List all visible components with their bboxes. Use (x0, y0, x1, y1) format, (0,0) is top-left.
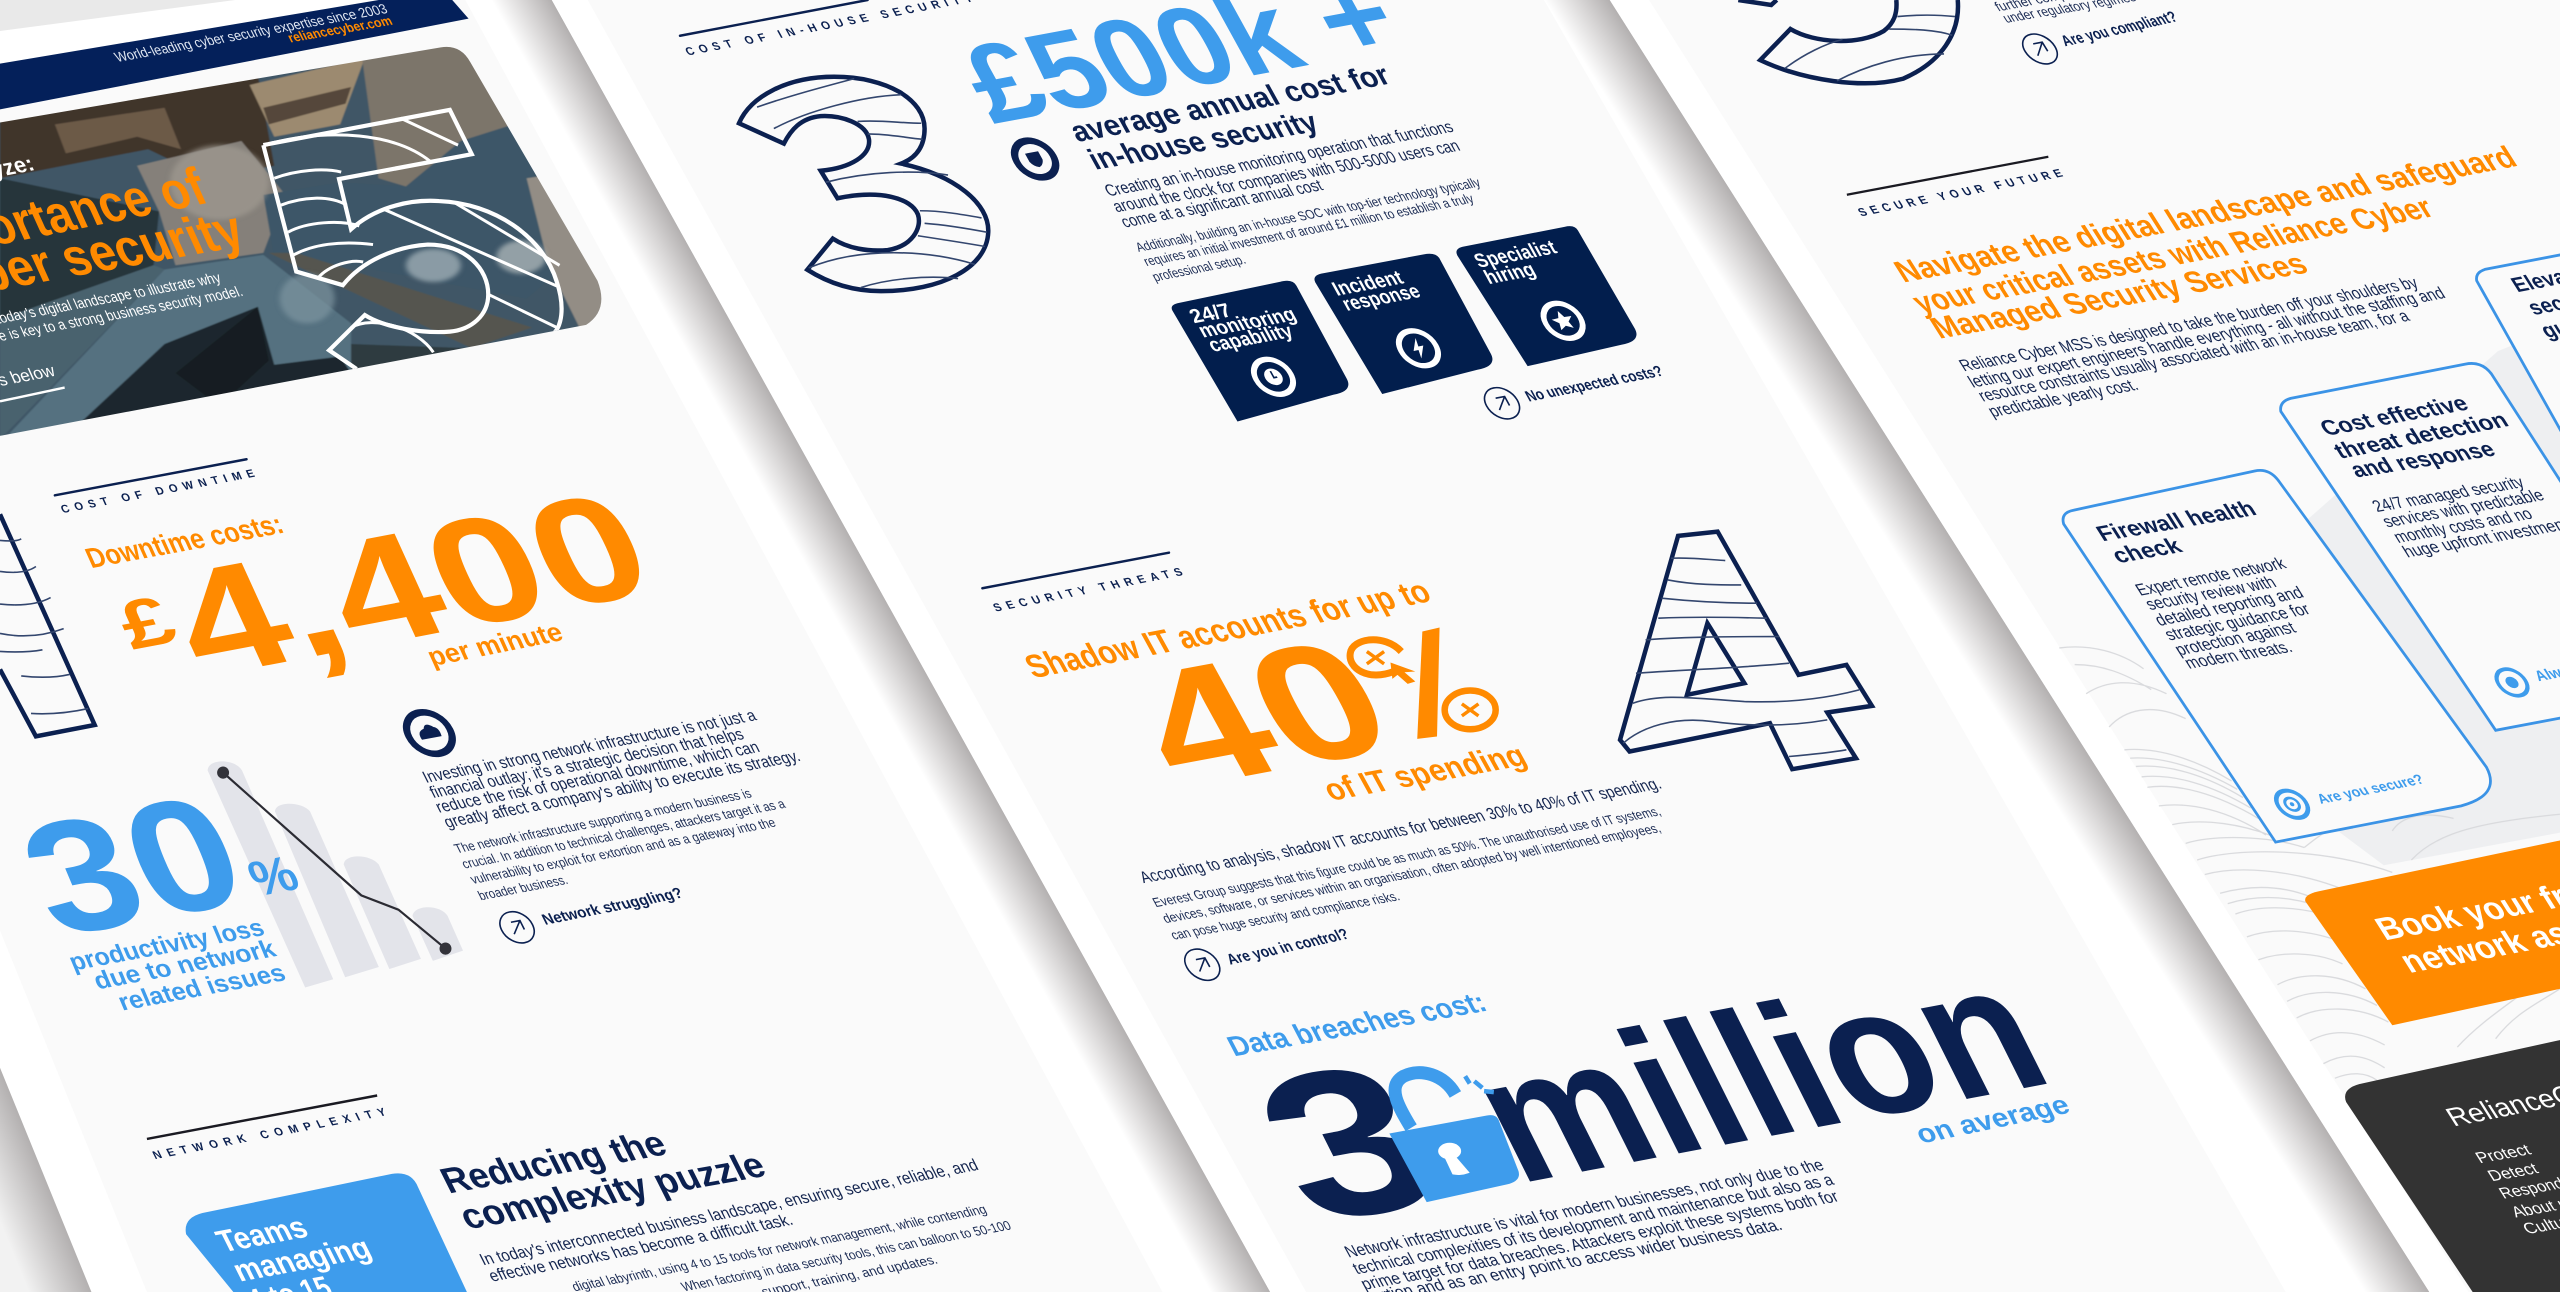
card text: hiring: Specialist (1471, 237, 1561, 272)
stat caption: on average (1910, 1089, 2075, 1149)
call to action: network struggling (494, 885, 686, 946)
percent sign: % (240, 845, 306, 907)
stat caption: in-house security (1082, 106, 1325, 176)
topographic background lines (2059, 327, 2560, 1080)
icon: clock (1247, 356, 1300, 397)
icon: cloud (399, 709, 460, 757)
body: complexity small print: digital labyrinth, using 4 to 15 tools for network management, while contending (569, 1202, 989, 1292)
numeral 3 outline (739, 77, 988, 291)
orange call to action (2305, 829, 2560, 1025)
data breach heading: Data breaches cost: (1222, 987, 1492, 1063)
downtime number: 4,400 (144, 461, 675, 709)
body: shadow IT small print: Everest Group suggests that this figure could be as much as 50%. The unauthorised use of IT systems, (1150, 804, 1664, 910)
card text: incident: Incident (1328, 267, 1408, 300)
card text: monitoring: monitoring (1195, 304, 1301, 342)
card title: threat detection (2329, 408, 2513, 463)
section rule: network complexity (147, 1096, 389, 1162)
section rule: cost of in-house security (680, 0, 975, 58)
header website: reliancecyber.com (285, 13, 395, 45)
call to action: compliant: Are you compliant? (2058, 9, 2181, 50)
card body: modern threats. (2180, 637, 2296, 672)
body: managed services: resource constraints usually associated with an in-house team, for a (1974, 306, 2413, 405)
body: network investment: Investing in strong network infrastructure is not just a (419, 706, 760, 787)
body: network small print (452, 786, 788, 903)
body: complexity: In today's interconnected business landscape, ensuring secure, reliable, and (476, 1155, 981, 1269)
body: in-house small print: requires an initial investment of around £1 million to establish a truly (1141, 191, 1477, 269)
footer menu: Protect (2472, 1141, 2535, 1167)
card text: monitoring (1186, 300, 1301, 356)
stat caption: productivity loss (65, 914, 269, 976)
body: network investment: financial outlay; it's a strategic decision that helps (426, 725, 747, 802)
body: managed services: Reliance Cyber MSS is designed to take the burden off your shoulders by (1955, 273, 2422, 375)
body: network investment: greatly affect a company's ability to execute its strategy. (440, 746, 804, 831)
call to action: unexpected costs (1478, 363, 1667, 421)
body: network small print: The network infrastructure supporting a modern business is (452, 786, 754, 856)
stat caption: related issues (114, 959, 290, 1016)
body: shadow IT: According to analysis, shadow IT accounts for between 30% to 40% of IT spending. (1136, 774, 1665, 887)
card title (2315, 391, 2513, 482)
card body: 24/7 managed security (2368, 472, 2528, 516)
stat caption (65, 914, 290, 1016)
blue panel: teams managing: Teams (211, 1210, 313, 1259)
icon: bolt (1392, 328, 1445, 369)
stat caption: of IT spending (1317, 737, 1533, 807)
navy cards backgrounds (1172, 226, 1637, 422)
blue panel: teams managing: managing (227, 1230, 377, 1288)
body: data breaches: technical complexities of its development and maintenance but also as a (1349, 1170, 1838, 1278)
card body: Expert remote network (2131, 553, 2290, 599)
card title (2091, 496, 2261, 568)
header bar (0, 0, 469, 109)
body: managed services: predictable yearly cost. (1984, 375, 2142, 421)
section rule: cost of downtime (55, 459, 257, 516)
card: cost effective (2281, 363, 2560, 730)
section label: SECURITY THREATS (991, 566, 1185, 614)
card text: hiring (1471, 237, 1561, 289)
body: in-house monitoring: around the clock for companies with 500-5000 users can (1109, 136, 1463, 216)
heading: complexity puzzle: Reducing the (434, 1123, 673, 1201)
numeral 5 outline (263, 110, 562, 369)
icon: target (2270, 788, 2314, 820)
card text: incident: response (1338, 281, 1425, 315)
card title: Firewall health (2091, 496, 2261, 546)
stat: million: million (1441, 927, 2075, 1220)
blue panel: teams managing (186, 1173, 473, 1292)
card text: hiring: hiring (1480, 259, 1540, 289)
chart: declining bars (208, 761, 463, 987)
call to action: compliant (2016, 9, 2181, 66)
stat: 3: 3 (1221, 1018, 1476, 1268)
per minute: per minute (422, 617, 567, 672)
body: data breaches: Network infrastructure is vital for modern businesses, not only due to the (1341, 1156, 1827, 1261)
body: in-house small print: professional setup. (1149, 252, 1248, 284)
dark footer (2345, 1029, 2560, 1292)
body: network investment: reduce the risk of operational downtime, which can (432, 738, 763, 816)
icon: star (1537, 300, 1590, 341)
body: in-house monitoring: Creating an in-house monitoring operation that functions (1101, 117, 1457, 200)
body: complexity small print: When factoring in data security tools, this can balloon to 50-100 (678, 1218, 1014, 1292)
heading: complexity puzzle: complexity puzzle (452, 1144, 772, 1237)
card body (2368, 472, 2560, 561)
stat caption: due to network (89, 935, 280, 995)
percent built from icons (1350, 628, 1496, 739)
footer menu (2472, 1141, 2560, 1238)
body: in-house monitoring (1101, 117, 1463, 231)
icon: shield target (2491, 667, 2533, 698)
body: complexity: effective networks has become a difficult task. (485, 1210, 796, 1285)
numeral 4 outline (1620, 532, 1872, 769)
body: network small print: broader business. (475, 872, 570, 903)
card body: services with predictable (2378, 485, 2548, 531)
card title: check (2107, 533, 2187, 568)
body: network small print: vulnerability to exploit for extortion and as a gateway into the (468, 815, 778, 887)
call to action: in control: Are you in control? (1224, 926, 1352, 968)
body: in-house small print: Additionally, building an in-house SOC with top-tier technology typically (1133, 175, 1483, 255)
call to action: network struggling: Network struggling? (539, 885, 686, 929)
card link: Are you secure? (2314, 772, 2428, 808)
body: shadow IT small print: can pose huge security and compliance risks. (1168, 889, 1402, 943)
card: elevated security (2477, 245, 2560, 522)
stat caption: average annual cost for (1064, 59, 1397, 149)
body: network small print: crucial. In addition to technical challenges, attackers target it as a (459, 796, 788, 871)
card text: incident (1328, 267, 1425, 315)
card body (2131, 553, 2314, 672)
card body: strategic guidance for (2160, 599, 2314, 644)
numeral 1 outline (0, 514, 95, 736)
body: managed services: letting our expert engineers handle everything - all without the staffing and (1964, 283, 2449, 391)
body: in-house monitoring: come at a significant annual cost (1117, 176, 1326, 231)
card body: detailed reporting and (2151, 582, 2307, 630)
card title: and response (2345, 437, 2500, 482)
card body: monthly costs and no (2389, 504, 2536, 547)
hero photo (0, 33, 614, 448)
section label: SECURE YOUR FUTURE (1855, 166, 2065, 219)
call to action: unexpected costs: No unexpected costs? (1522, 363, 1667, 405)
downtime heading: Downtime costs: (81, 509, 289, 575)
call to action: in control (1178, 926, 1352, 983)
section rule: secure your future (1847, 157, 2065, 219)
pound sign: £ (105, 581, 188, 664)
body: data breaches: prime target for data breaches. Attackers exploit these systems both for (1357, 1187, 1842, 1292)
icon: shield (1007, 138, 1063, 180)
body: shadow IT small print: devices, software, or services within an organisation, often adopted by well intentioned employees, (1160, 821, 1664, 926)
section label: NETWORK COMPLEXITY (151, 1107, 389, 1162)
card text: monitoring: capability (1204, 320, 1298, 356)
heading: navigate: Navigate the digital landscape and safeguard (1887, 139, 2523, 289)
numeral 3 bottom outline (1738, 0, 1958, 83)
shadow IT heading: Shadow IT accounts for up to (1019, 574, 1438, 686)
heading: navigate: Managed Security Services (1924, 247, 2314, 345)
card text: monitoring: 24/7 (1186, 300, 1236, 328)
body: network investment (419, 706, 804, 831)
heading: navigate: your critical assets with Reliance Cyber (1905, 189, 2440, 320)
section rule: security threats (982, 553, 1185, 614)
icon: open padlock (1389, 1073, 1519, 1202)
card title: Cost effective (2315, 391, 2473, 440)
stat: 40: 40 (1101, 605, 1422, 822)
section label: COST OF DOWNTIME (59, 468, 257, 516)
card: firewall health check (2063, 470, 2490, 842)
card body: protection against (2170, 617, 2300, 659)
card body: security review with (2141, 572, 2280, 614)
stat: 30 percent: 30 (0, 762, 269, 970)
footer menu: Detect (2484, 1160, 2542, 1185)
